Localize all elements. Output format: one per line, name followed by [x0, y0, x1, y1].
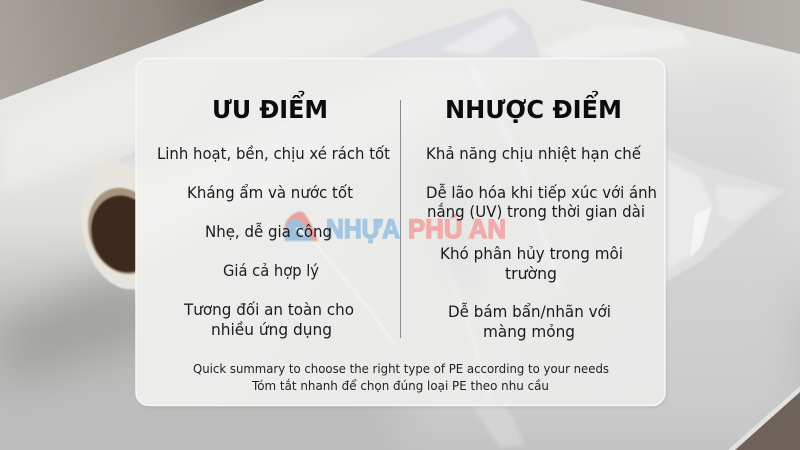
- disadvantages list: Dễ lão hóa khi tiếp xúc với ánh: [426, 183, 657, 202]
- advantages list: Kháng ẩm và nước tốt: [187, 183, 353, 202]
- disadvantages list: nắng (UV) trong thời gian dài: [427, 202, 645, 221]
- footer summary: [193, 361, 609, 393]
- heading: advantages: ƯU ĐIỂM: [212, 90, 328, 124]
- watermark name red: PHÚ AN: [408, 213, 506, 244]
- disadvantages list: Khó phân hủy trong môi: [440, 244, 623, 263]
- disadvantages list: Dễ bám bẩn/nhãn với: [448, 302, 611, 321]
- watermark logo: [284, 212, 506, 244]
- roll end: [82, 164, 136, 290]
- roll core: [87, 187, 136, 275]
- column divider: [400, 100, 401, 338]
- roll body: [120, 7, 541, 300]
- watermark name: NHỰA: [326, 214, 400, 244]
- advantages list: Linh hoạt, bền, chịu xé rách tốt: [157, 144, 390, 163]
- heading: disadvantages: NHƯỢC ĐIỂM: [445, 90, 622, 124]
- disadvantages list: Khả năng chịu nhiệt hạn chế: [426, 144, 641, 163]
- advantages list: [157, 144, 390, 339]
- roll hole: [90, 194, 136, 274]
- disadvantages list: màng mỏng: [483, 322, 575, 341]
- advantages list: Giá cả hợp lý: [223, 261, 319, 280]
- advantages list: Nhẹ, dễ gia công: [205, 222, 332, 241]
- info panel: [130, 58, 665, 406]
- footer summary: Quick summary to choose the right type of PE according to your needs: [193, 361, 609, 376]
- advantages list: Tương đối an toàn cho: [183, 300, 354, 319]
- watermark icon: [284, 212, 318, 241]
- disadvantages list: [426, 144, 657, 341]
- advantages list: nhiều ứng dụng: [211, 320, 332, 339]
- panel shadow: [138, 62, 665, 406]
- disadvantages list: trường: [505, 264, 557, 283]
- roll end face: [82, 164, 136, 290]
- footer summary: Tóm tắt nhanh để chọn đúng loại PE theo nhu cầu: [251, 378, 549, 393]
- film sheet: [660, 146, 786, 285]
